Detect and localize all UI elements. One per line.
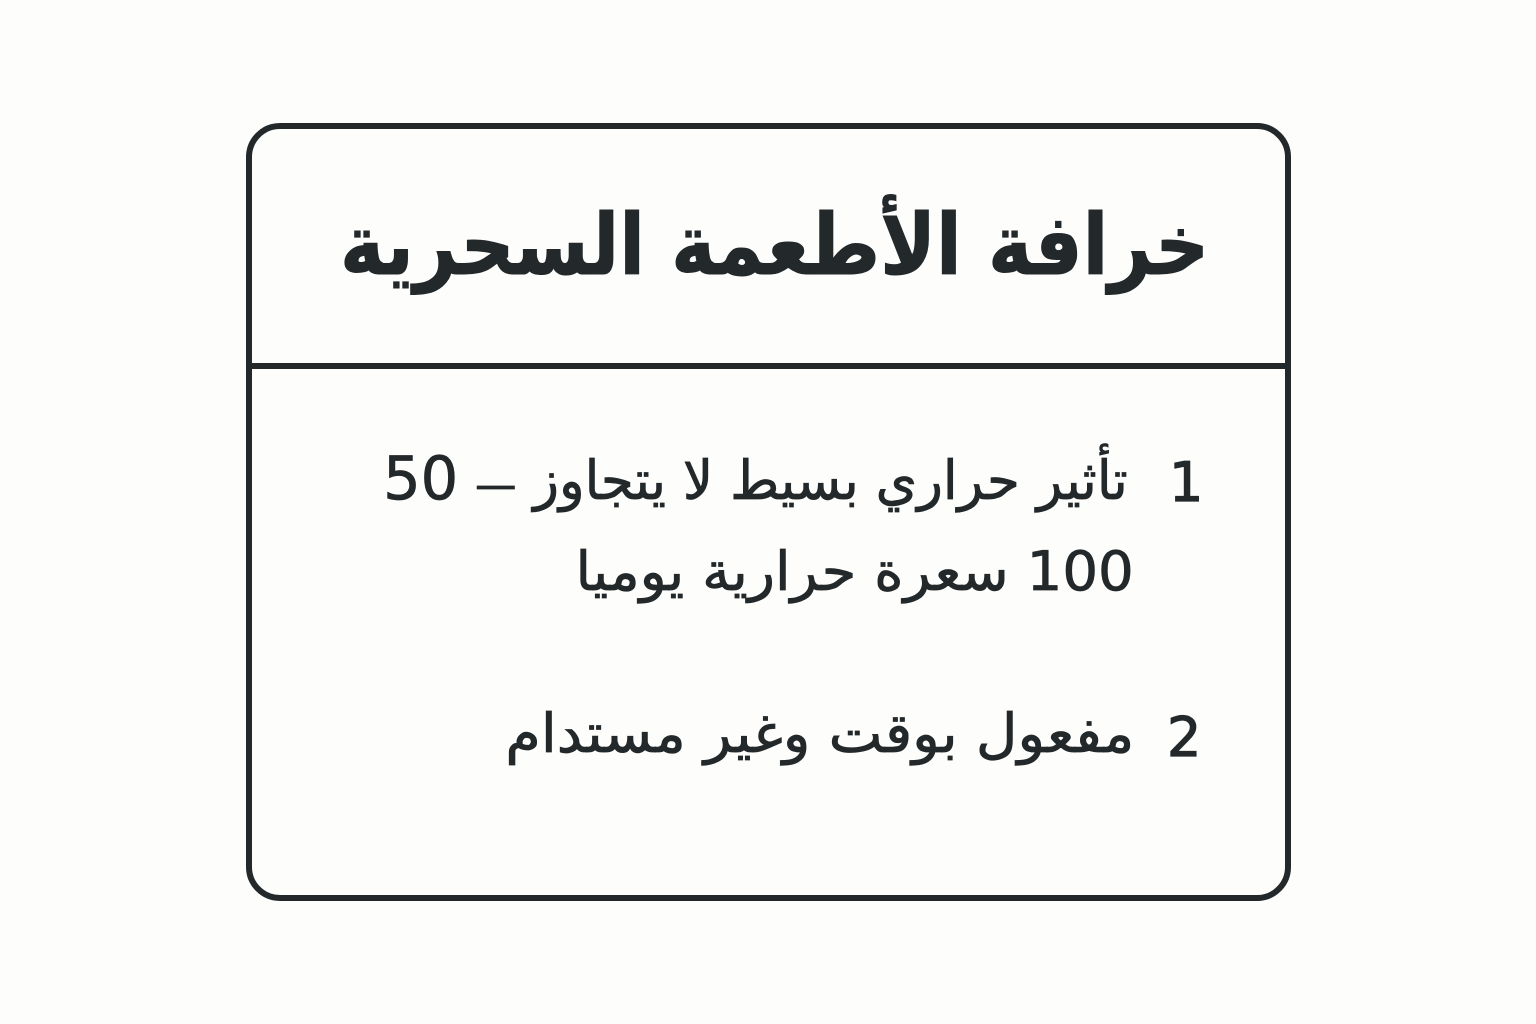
list item 2: مفعول بوقت وغير مستدام <box>505 702 1134 765</box>
divider under heading <box>250 363 1287 369</box>
list item 1, line 2: 100 سعرة حرارية يوميا <box>576 540 1134 603</box>
list item 1, line 1: تأثير حراري بسيط لا يتجاوز — 50 <box>383 444 1128 514</box>
list number 1: 1 <box>1169 451 1203 514</box>
title: خرافة الأطعمة السحرية <box>340 196 1209 294</box>
list number 2: 2 <box>1167 706 1201 769</box>
panel: myth card <box>246 123 1291 901</box>
